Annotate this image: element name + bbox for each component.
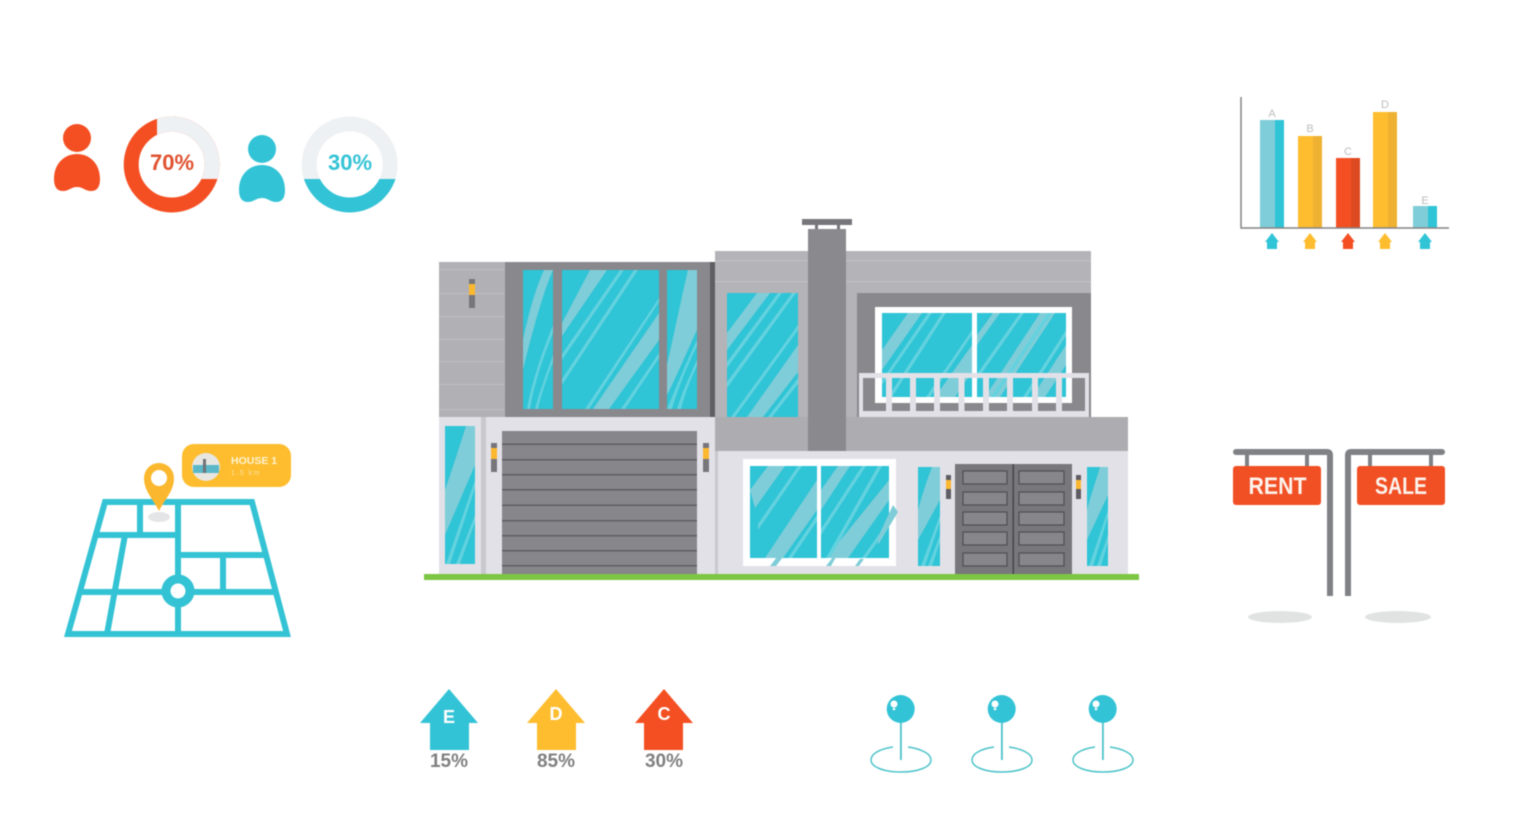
map pin marker 3: [1073, 695, 1133, 772]
upper right siding: [715, 251, 1128, 451]
donut chart: 70%: [131, 124, 212, 205]
donut chart: 30%: 30%: [328, 150, 372, 175]
middle upper window: [727, 293, 798, 417]
garage door: [502, 431, 697, 574]
bar A: [1260, 108, 1284, 228]
bar D: [1373, 99, 1397, 228]
chart axes: [1241, 97, 1449, 228]
narrow centre window: [918, 467, 940, 566]
callout: house 1: 1.5 km: [231, 470, 261, 477]
arrow: D 85%: 85%: [537, 751, 575, 772]
bar E: [1413, 195, 1437, 228]
rent sign: RENT: [1248, 473, 1307, 500]
map pin marker 2: [972, 695, 1032, 772]
map grid: [68, 502, 287, 634]
lower sliding window: [743, 459, 898, 566]
upper left siding: [439, 262, 505, 417]
arrow: D 85%: [527, 689, 585, 772]
large upper window: [505, 262, 715, 417]
bar chart: [1241, 97, 1449, 249]
bar B: [1298, 123, 1322, 228]
bar C: [1336, 146, 1360, 228]
arrow: E 15%: 15%: [430, 751, 468, 772]
location pin: [144, 463, 174, 511]
sale sign: [1348, 449, 1445, 596]
donut chart: 30%: [309, 124, 390, 205]
bar D: D: [1381, 99, 1389, 111]
map with location pin: [68, 444, 291, 634]
bar B: B: [1306, 123, 1314, 135]
lower walls: [439, 417, 1128, 574]
bar A: A: [1268, 108, 1276, 120]
pin shadow: [148, 512, 170, 522]
ground strip: [424, 574, 1139, 580]
double front door: [955, 464, 1072, 574]
balcony window: [857, 293, 1091, 417]
narrow left window: [445, 426, 475, 564]
balcony railing: [859, 373, 1089, 417]
chart arrows: [1265, 233, 1432, 249]
callout: house 1: HOUSE 1: [231, 455, 277, 467]
arrow: D 85%: D: [550, 704, 562, 724]
arrow: C 30%: C: [658, 704, 670, 724]
arrow: E 15%: E: [443, 707, 455, 727]
person icon: teal: [239, 135, 285, 202]
person icon: orange: [54, 124, 100, 191]
map pin marker 1: [871, 695, 931, 772]
arrow: C 30%: [635, 689, 693, 772]
sale sign: SALE: [1375, 473, 1427, 500]
bar E: E: [1421, 195, 1429, 207]
bar C: C: [1344, 146, 1352, 158]
house illustration: [424, 219, 1139, 580]
narrow right window: [1087, 467, 1108, 566]
donut chart: 70%: 70%: [150, 150, 194, 175]
callout: house 1: [182, 444, 291, 487]
chimney: [802, 219, 852, 451]
sign shadows: [1248, 611, 1431, 623]
rent sign: [1233, 449, 1330, 596]
arrow: C 30%: 30%: [645, 751, 683, 772]
arrow: E 15%: [420, 689, 478, 772]
wall lights: [469, 279, 1081, 499]
